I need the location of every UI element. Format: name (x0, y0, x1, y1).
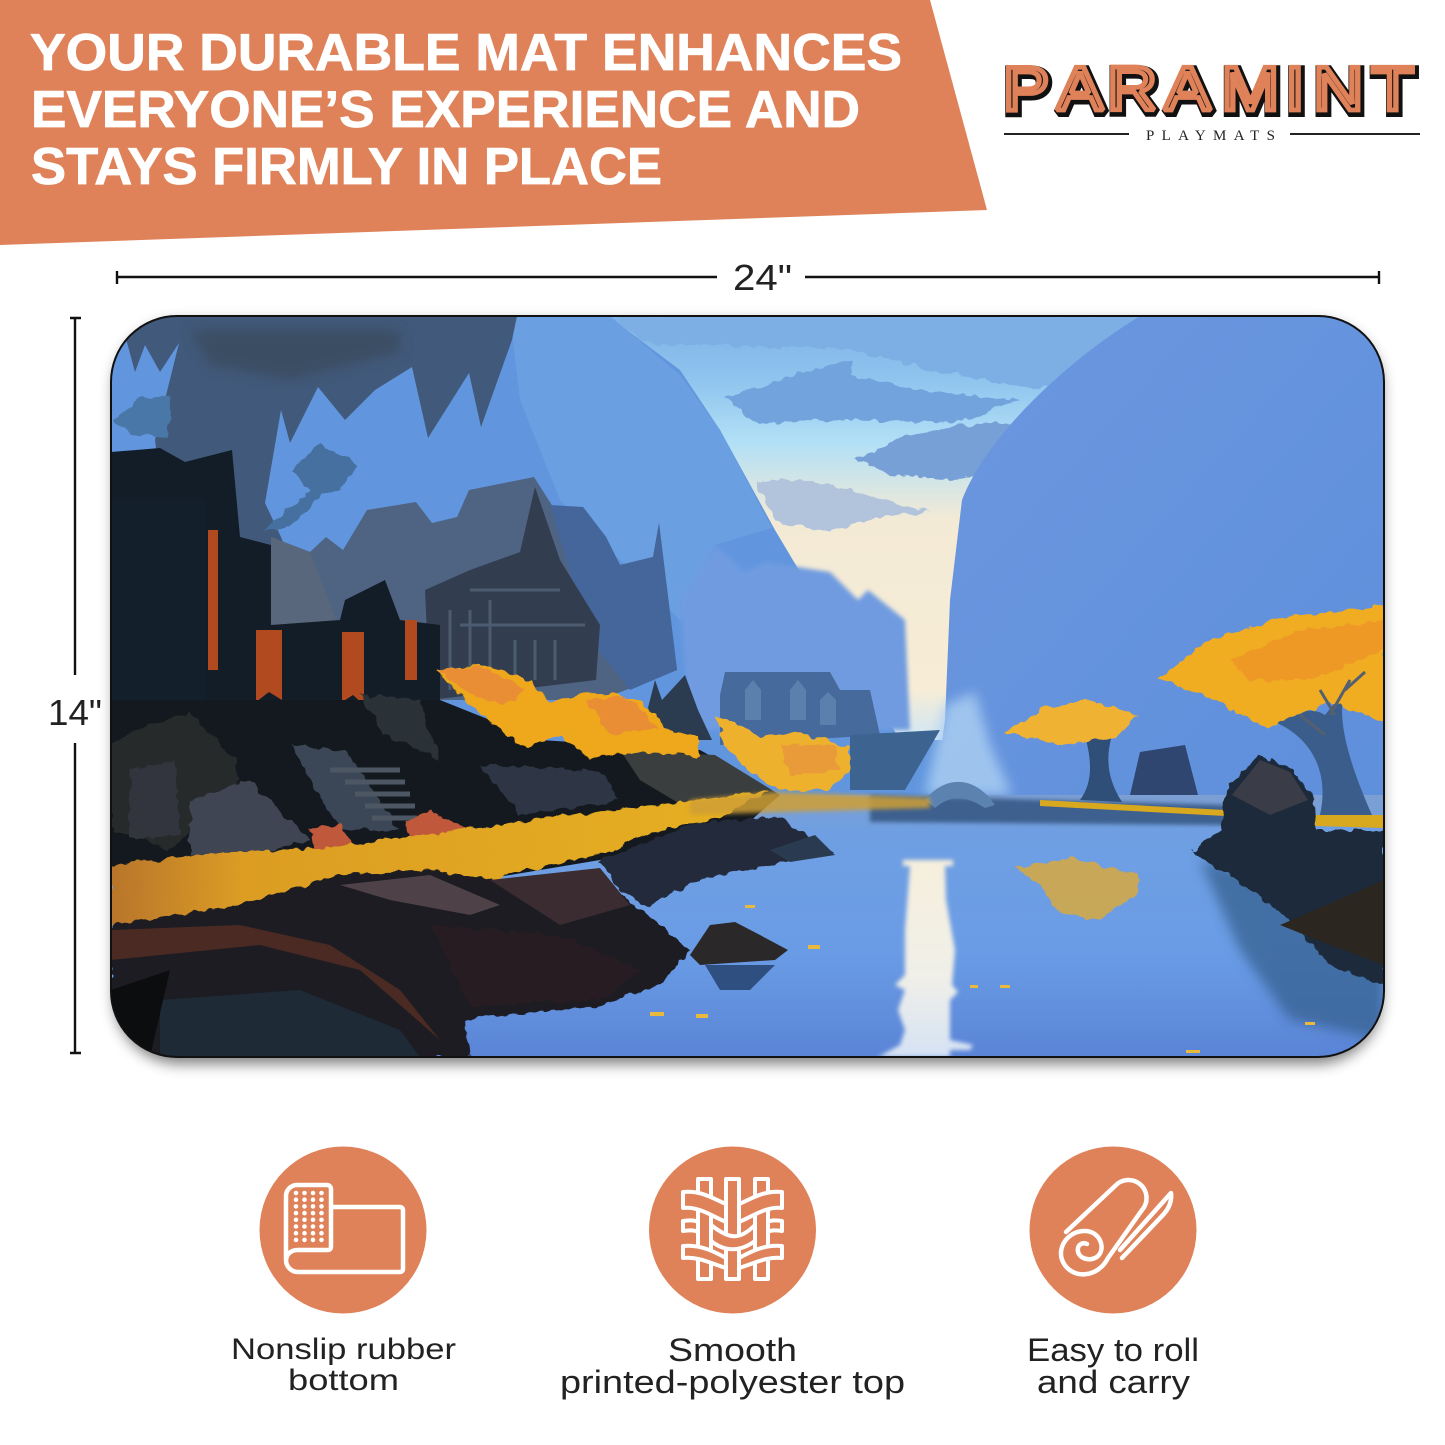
clouds (638, 336, 1108, 532)
sky (608, 316, 1145, 740)
grey rocks (111, 695, 620, 858)
label (231, 1333, 456, 1397)
label: Nonslip rubber (231, 1333, 456, 1366)
left foliage (115, 395, 172, 438)
logo: Paramint Playmats: PARAMINT (1005, 56, 1416, 126)
feature: smooth polyester top (560, 1146, 905, 1400)
grey roofs (271, 477, 677, 700)
width dimension: 24 inches (117, 257, 1379, 298)
mid tree (1003, 700, 1137, 802)
headline: EVERYONE’S EXPERIENCE AND (31, 81, 860, 139)
bridge (925, 782, 995, 808)
moss tree (126, 317, 517, 545)
icon: rolled mat (1030, 1146, 1196, 1314)
golden path (111, 790, 770, 934)
castle windows (745, 680, 836, 725)
header banner (0, 0, 987, 245)
cliff base mist (925, 692, 1012, 795)
far shore (870, 795, 1225, 825)
feature: easy to roll and carry (1027, 1146, 1199, 1400)
right shore reflection (1200, 860, 1384, 1040)
floating leaves (650, 905, 1315, 1053)
spruce trees (648, 675, 712, 740)
water (111, 795, 1384, 1057)
left bushes (438, 664, 700, 758)
blue wing (550, 505, 677, 690)
label (560, 1332, 905, 1400)
right cliff (942, 317, 1145, 740)
label: and carry (1037, 1364, 1190, 1400)
distant castle (680, 545, 910, 730)
grey gable (271, 537, 336, 625)
near castle (720, 672, 880, 745)
right dark rock (1280, 880, 1384, 965)
headline: YOUR DURABLE MAT ENHANCES (30, 24, 902, 82)
right boulder (1190, 755, 1384, 985)
foreground rocks (111, 868, 690, 1057)
mansion details (450, 590, 585, 690)
shrub ground (623, 752, 780, 802)
logo: Paramint Playmats: PARAMINT (1003, 53, 1414, 123)
headline (30, 24, 902, 196)
small distant tree (265, 443, 358, 530)
label (1027, 1332, 1199, 1400)
left cliff highlight (510, 316, 772, 620)
playmat artwork (111, 316, 1384, 1057)
small house (1130, 745, 1198, 795)
golden reflection (1015, 858, 1138, 920)
right bushes (715, 715, 850, 790)
shore rock reflection (705, 965, 775, 990)
height dimension: 14 inches (48, 318, 102, 1054)
red shrubs (310, 810, 475, 852)
mansion (425, 487, 600, 700)
right tree (1158, 606, 1384, 815)
stairs (330, 770, 417, 818)
headline: STAYS FIRMLY IN PLACE (31, 138, 662, 196)
icon: rubber mat corner (260, 1146, 426, 1314)
label: Smooth (668, 1332, 797, 1368)
label: Easy to roll (1027, 1332, 1199, 1368)
mat border (111, 316, 1384, 1057)
ship-shaped hall (850, 730, 940, 790)
far shore rocks (770, 835, 835, 862)
dark hall panel (111, 500, 206, 710)
dark ground (111, 700, 780, 880)
width dimension: 24 inches: 24" (733, 257, 792, 298)
sun reflection (878, 860, 973, 1057)
height dimension: 14 inches: 14" (48, 692, 102, 733)
feature: nonslip rubber bottom (231, 1146, 456, 1397)
shore grasses (1040, 800, 1384, 828)
dark left hall (112, 448, 440, 700)
shore dark band (600, 818, 835, 906)
background blue (112, 328, 942, 795)
label: printed-polyester top (560, 1364, 905, 1400)
icon: woven fabric (649, 1146, 816, 1314)
label: bottom (288, 1364, 399, 1397)
yellow shoreline (690, 792, 930, 815)
logo: Paramint Playmats: PLAYMATS (1146, 128, 1275, 144)
mat drop shadow (114, 322, 1382, 1064)
shore rock (690, 922, 788, 965)
boulder top (1232, 760, 1308, 815)
banners (208, 530, 417, 705)
